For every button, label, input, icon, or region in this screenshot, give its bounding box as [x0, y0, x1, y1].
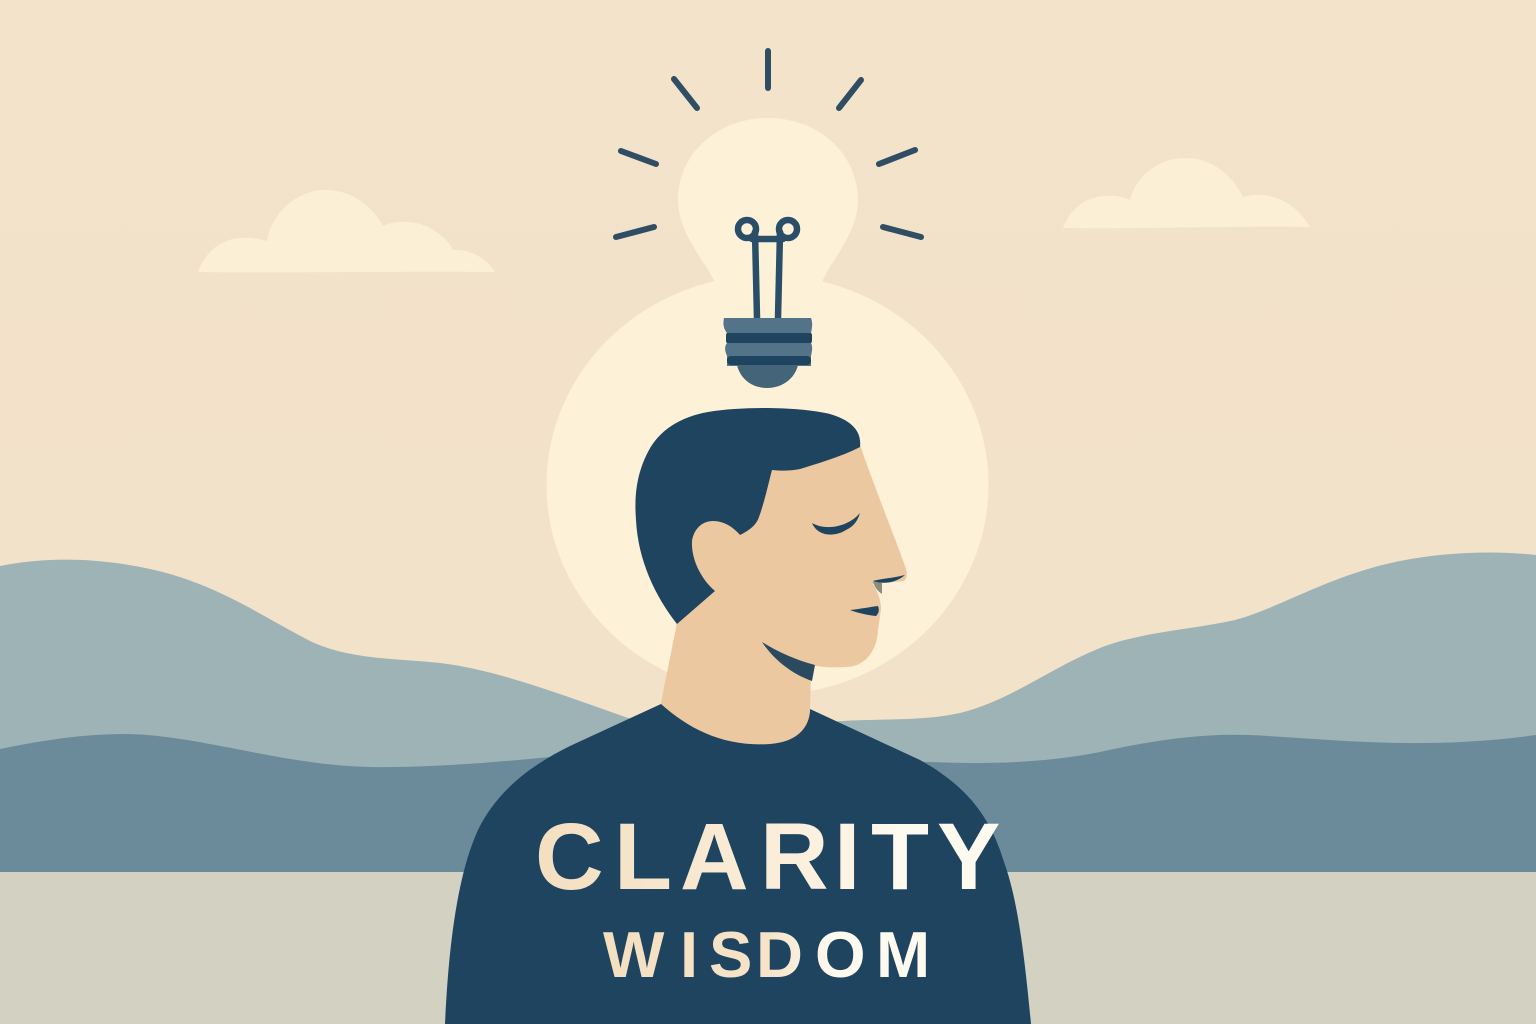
light rays — [616, 51, 921, 237]
person — [445, 408, 1031, 1024]
nose shadow — [873, 581, 882, 594]
back hills — [0, 553, 1536, 880]
torso — [445, 704, 1031, 1024]
closed eye — [812, 513, 860, 535]
ground band — [0, 872, 1536, 1024]
screw base — [723, 318, 812, 366]
base band upper — [726, 333, 812, 343]
hair with ear cutout — [635, 408, 860, 624]
bulb tip — [737, 365, 798, 388]
subtitle: WISDOM: WISDOM — [603, 918, 930, 991]
base band lower — [727, 356, 811, 365]
title: CLARITY: CLARITY — [535, 804, 1000, 910]
bulb glass — [678, 118, 858, 320]
nose line — [873, 575, 905, 583]
chin shadow — [762, 642, 815, 681]
filament — [738, 220, 797, 318]
cloud: right — [1063, 158, 1310, 228]
front hills — [0, 734, 1536, 880]
neck and face skin — [661, 430, 907, 744]
glow circle behind head — [546, 275, 988, 695]
light bulb — [678, 118, 858, 388]
mouth — [850, 606, 879, 616]
cloud: left — [198, 190, 495, 272]
